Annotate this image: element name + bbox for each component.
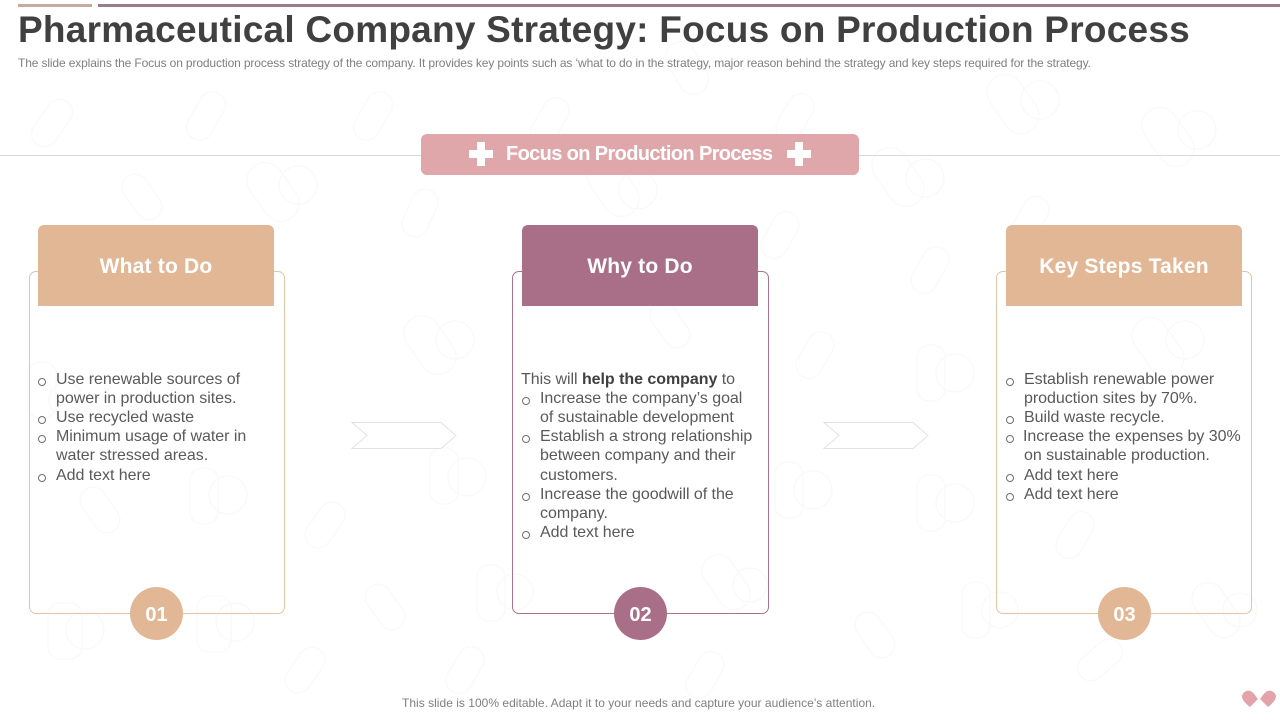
list: what to do: water stressed areas. <box>56 447 208 464</box>
panel: what to do <box>29 225 285 640</box>
list: why to do: Add text here <box>540 524 635 541</box>
banner label: Focus on Production Process <box>506 143 772 165</box>
top accent bars <box>18 4 1280 7</box>
list: why to do: Establish a strong relationship <box>540 428 752 445</box>
icon: right plus <box>787 142 811 166</box>
title: Pharmaceutical Company Strategy: Focus on Production Process <box>18 9 1190 50</box>
list: why to do: company. <box>540 505 608 522</box>
list: why to do: between company and their <box>540 447 736 464</box>
heading: what to do: What to Do <box>100 255 212 278</box>
icon: left plus <box>469 142 493 166</box>
list: what to do: Minimum usage of water in <box>56 428 246 445</box>
panel: why to do <box>512 225 769 640</box>
list: key steps taken <box>1006 371 1241 503</box>
list: key steps taken: on sustainable production. <box>1024 447 1210 464</box>
list: key steps taken: Increase the expenses by 30% <box>1023 428 1241 445</box>
heading: key steps taken <box>1006 225 1242 306</box>
footer note: This slide is 100% editable. Adapt it to your needs and capture your audience’s attention. <box>402 696 875 710</box>
list: key steps taken: Add text here <box>1024 467 1119 484</box>
list: what to do: Add text here <box>56 467 151 484</box>
heading: what to do <box>38 225 274 306</box>
list: why to do: This will help the company to <box>521 371 735 388</box>
list: why to do: Increase the company’s goal <box>540 390 742 407</box>
heading: why to do: Why to Do <box>587 255 693 278</box>
heading: key steps taken: Key Steps Taken <box>1039 255 1209 278</box>
number badge 03: 03 <box>1113 604 1136 626</box>
list: key steps taken: Add text here <box>1024 486 1119 503</box>
list: why to do: Increase the goodwill of the <box>540 486 734 503</box>
list: key steps taken: production sites by 70%. <box>1024 390 1197 407</box>
number badge 02 <box>614 587 667 640</box>
icon: decorative hearts <box>1242 690 1276 707</box>
list: why to do: customers. <box>540 467 618 484</box>
arrow: first chevron <box>351 422 456 449</box>
list: what to do: Use renewable sources of <box>56 371 240 388</box>
list: key steps taken: Establish renewable power <box>1024 371 1214 388</box>
number badge 01: 01 <box>145 604 168 626</box>
number badge 02: 02 <box>629 604 652 626</box>
subtitle: The slide explains the Focus on production process strategy of the company. It provides key points such as ‘what to do in the strategy, major reason behind the strategy and key steps required for the strategy. <box>18 56 1091 70</box>
list: what to do: Use recycled waste <box>56 409 194 426</box>
list: why to do: of sustainable development <box>540 409 734 426</box>
list: what to do <box>38 371 246 484</box>
list: why to do <box>521 371 752 541</box>
number badge 01 <box>130 587 183 640</box>
heading: why to do <box>522 225 758 306</box>
list: what to do: power in production sites. <box>56 390 236 407</box>
list: key steps taken: Build waste recycle. <box>1024 409 1165 426</box>
banner: focus on production process <box>421 134 859 175</box>
panel: key steps taken <box>996 225 1252 640</box>
number badge 03 <box>1098 587 1151 640</box>
arrow: second chevron <box>823 422 928 449</box>
